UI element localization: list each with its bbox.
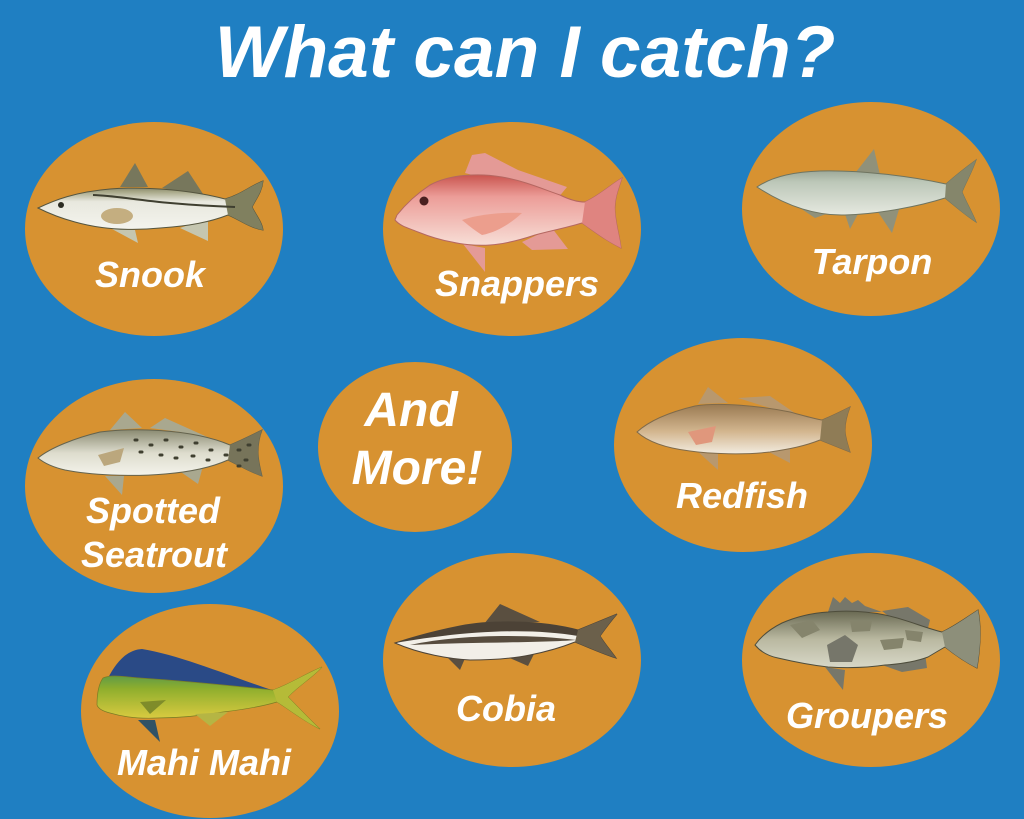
panel: tarpon xyxy=(742,102,1000,316)
panel: mahi mahi xyxy=(81,604,339,818)
icon: tarpon fish xyxy=(757,149,976,233)
icon: grouper fish xyxy=(755,597,980,690)
icon: spotted seatrout fish xyxy=(38,412,262,495)
panel: groupers xyxy=(742,553,1000,767)
label: spotted seatrout: Seatrout xyxy=(81,534,229,575)
label: spotted seatrout xyxy=(81,490,229,575)
panel: cobia xyxy=(383,553,641,767)
icon: redfish xyxy=(637,387,850,470)
panel: and more xyxy=(318,362,512,532)
label: cobia: Cobia xyxy=(456,688,556,729)
label: mahi mahi: Mahi Mahi xyxy=(117,742,292,783)
label: redfish: Redfish xyxy=(676,475,808,516)
panel: snook xyxy=(25,122,283,336)
panel: and more: More! xyxy=(352,442,482,495)
label: and more: And xyxy=(363,384,459,437)
title: What can I catch? xyxy=(215,12,835,93)
icon: snapper fish xyxy=(395,153,622,272)
label: groupers: Groupers xyxy=(786,695,948,736)
icon: mahi mahi fish xyxy=(97,649,322,742)
panel: spotted seatrout xyxy=(25,379,283,593)
label: spotted seatrout: Spotted xyxy=(86,490,221,531)
label: snook: Snook xyxy=(95,254,207,295)
panel: redfish xyxy=(614,338,872,552)
label: snappers: Snappers xyxy=(435,263,599,304)
icon: snook fish xyxy=(38,163,263,243)
label: tarpon: Tarpon xyxy=(812,241,932,282)
panel: snappers xyxy=(383,122,641,336)
icon: cobia fish xyxy=(395,604,617,670)
